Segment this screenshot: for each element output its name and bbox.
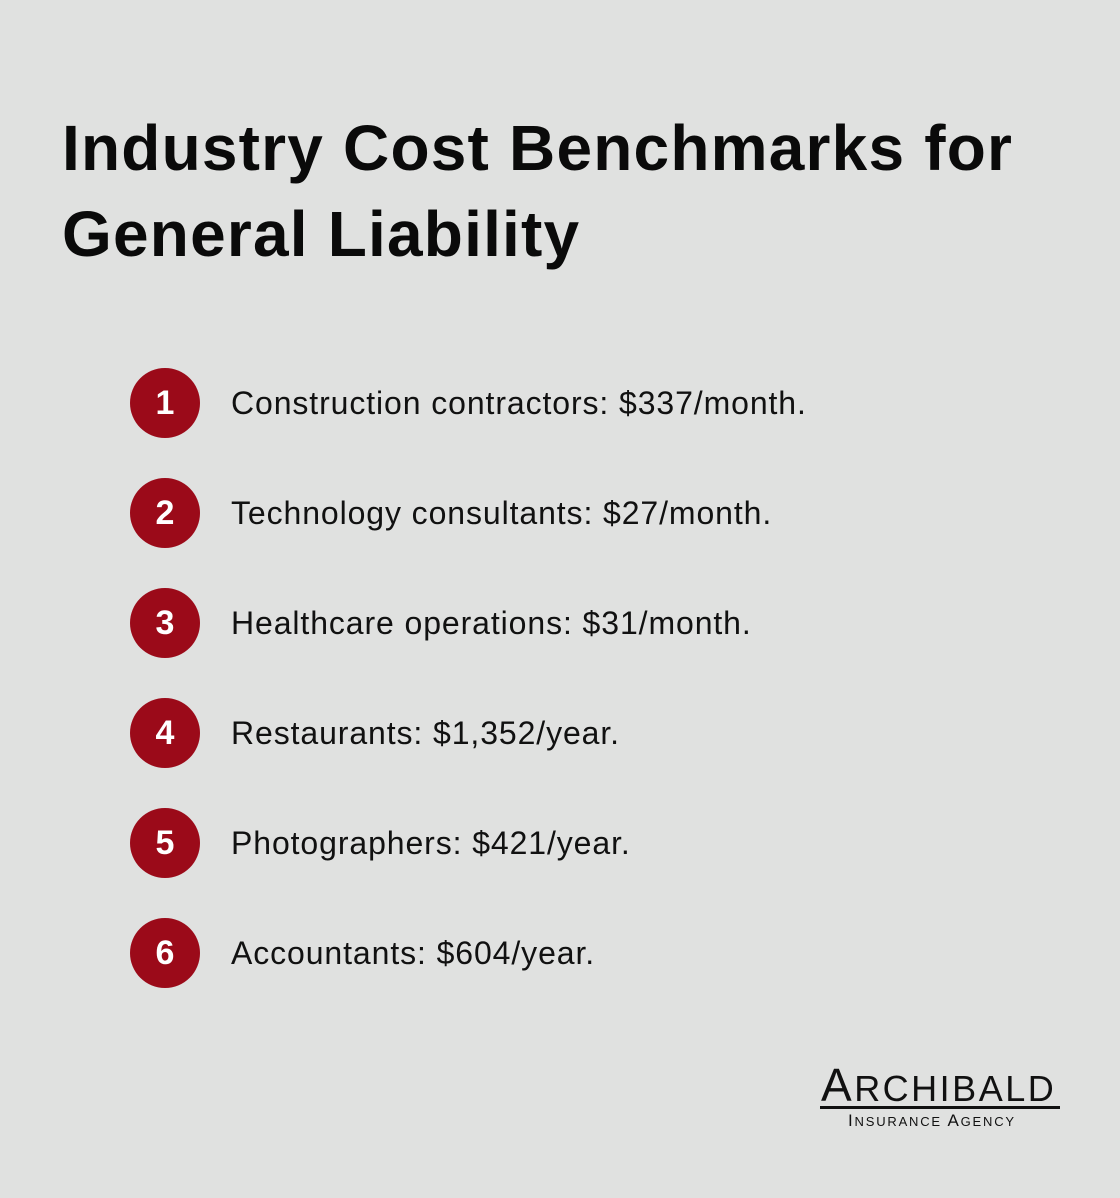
item 4: 4 [156,714,174,752]
item 5 [130,808,631,878]
logo: INSURANCE AGENCY [848,1111,1016,1130]
item 1: 1 [156,384,174,422]
item 6: 6 [156,934,174,972]
item 6: Accountants: $604/year. [231,935,595,971]
item 3 [130,588,752,658]
item 1: Construction contractors: $337/month. [231,385,807,421]
title: Industry Cost Benchmarks for [62,112,1013,184]
item 4 [130,698,620,768]
title [62,112,1013,270]
item 3: Healthcare operations: $31/month. [231,605,752,641]
item 6 [130,918,595,988]
title: General Liability [62,198,580,270]
item 2 [130,478,772,548]
logo: ARCHIBALD [821,1059,1056,1111]
item 2: Technology consultants: $27/month. [231,495,772,531]
item 5: Photographers: $421/year. [231,825,631,861]
item 4: Restaurants: $1,352/year. [231,715,620,751]
item 2: 2 [156,494,174,532]
item 5: 5 [156,824,174,862]
item 3: 3 [156,604,174,642]
item 1 [130,368,807,438]
